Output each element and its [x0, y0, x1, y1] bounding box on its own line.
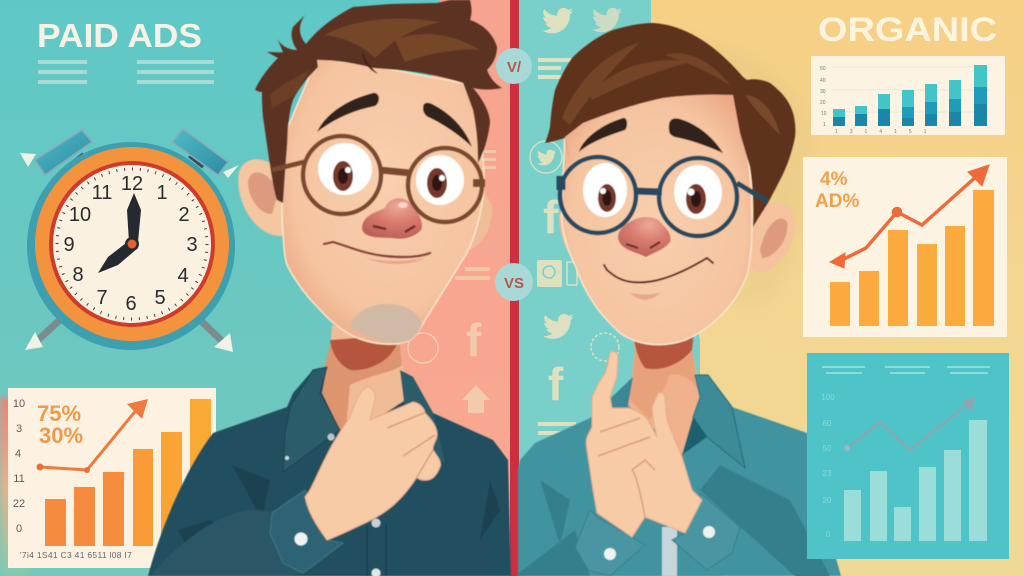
left cuff [575, 510, 645, 576]
clock numerals: 5 [154, 287, 166, 309]
shirt folds [178, 465, 500, 555]
hair [545, 23, 795, 227]
stacked bar chart: organic: 1314151 [835, 129, 938, 135]
shirt shading [515, 465, 830, 576]
chart bars [45, 399, 211, 546]
placket and buttons [367, 518, 386, 576]
nose [618, 217, 671, 257]
bell stems [70, 155, 204, 166]
glasses [560, 157, 768, 236]
bell pins [20, 153, 239, 178]
gridlines and axis labels: 40 [820, 78, 826, 84]
eyebrows [317, 93, 472, 147]
collar [610, 375, 745, 468]
clock numerals: 1 [156, 182, 168, 204]
alarm bells [35, 129, 228, 175]
left ear [238, 159, 283, 236]
clock legs [38, 317, 223, 342]
stubble [350, 304, 422, 343]
chart axis labels: 10 [13, 398, 25, 410]
hand [305, 387, 441, 540]
header lines [822, 366, 990, 374]
shirt [518, 375, 841, 576]
icon: facebook f: f [548, 358, 564, 410]
bars [833, 65, 987, 126]
icon: home [462, 385, 490, 413]
icon: twitter bird [543, 314, 574, 339]
icon: wheel [408, 333, 438, 363]
cuff button [703, 526, 715, 538]
bar chart: organic growth: AD% [815, 191, 859, 212]
trend arrow [36, 399, 148, 473]
clock numerals: 11 [92, 182, 112, 204]
cuff [270, 490, 343, 573]
axis labels [821, 393, 835, 539]
eyebrows [579, 118, 723, 153]
axis labels: 100 [821, 393, 835, 402]
gridlines and axis labels: 10 [821, 111, 827, 117]
trend arrow [830, 165, 989, 268]
vs badge top [496, 48, 532, 84]
gridlines and axis labels: 30 [820, 89, 826, 95]
icon: camera app [537, 260, 577, 287]
cuff button [604, 548, 616, 560]
bar chart: paid: 30% [39, 423, 83, 448]
right character [515, 23, 841, 576]
bar chart: organic growth [803, 157, 1007, 337]
clock numerals: 6 [125, 293, 137, 315]
glasses [272, 136, 485, 222]
cuff button [294, 532, 308, 546]
hands [586, 351, 702, 537]
clock hands [98, 193, 141, 273]
vs badge bottom [495, 263, 533, 301]
alarm clock [20, 129, 239, 352]
mouth [604, 258, 713, 282]
bars [844, 420, 987, 541]
icon: text lines [538, 58, 571, 79]
chart axis labels: 4 [15, 448, 21, 460]
eyes [583, 163, 722, 219]
trend arrow [844, 397, 976, 451]
clock numerals: 2 [178, 204, 190, 226]
icon: twitter circle [530, 141, 562, 173]
icon: clock outline [591, 333, 619, 361]
clock numerals: 7 [96, 287, 108, 309]
chart axis labels: 0 [16, 523, 22, 535]
shirt [148, 367, 511, 576]
chart axis labels: 22 [13, 498, 25, 510]
icon: twitter bird [542, 8, 573, 33]
clock body [27, 142, 235, 350]
chin crease [630, 293, 660, 300]
icon: text lines [470, 150, 496, 169]
clock numerals: 4 [177, 265, 189, 287]
bar chart: paid: '7i4 1S41 C3 41 6511 l08 I7 [20, 550, 132, 560]
eyes [318, 143, 464, 205]
title: organic: ORGANIC [818, 11, 997, 49]
left ear [559, 205, 573, 260]
clock numerals: 3 [186, 234, 198, 256]
hair [255, 0, 502, 203]
right ear [466, 190, 492, 250]
vs badge top: V/ [507, 59, 522, 76]
gridlines and axis labels: 20 [820, 100, 826, 106]
mouth [324, 242, 430, 264]
axis labels: 20 [823, 496, 832, 505]
neck [318, 325, 408, 440]
right cuff [672, 493, 740, 570]
bar chart: teal [807, 353, 1009, 559]
icon: twitter bird [592, 8, 622, 32]
clock tick marks [57, 169, 207, 319]
collar [283, 367, 445, 472]
percentages: 4% [820, 169, 848, 190]
zipper [662, 527, 677, 576]
clock numerals: 9 [63, 234, 75, 256]
face [282, 58, 484, 344]
gridlines and axis labels: 50 [820, 66, 826, 72]
title: paid ads [37, 17, 214, 84]
nose [362, 198, 422, 239]
chart axis labels: 3 [16, 423, 22, 435]
icon: facebook f: f [543, 191, 559, 243]
axis labels: 60 [823, 419, 832, 428]
clock numerals: 8 [72, 264, 84, 286]
left sleeve [150, 510, 303, 576]
axis labels: 0 [826, 530, 831, 539]
clock numerals: 12 [121, 173, 143, 195]
center divider [510, 0, 519, 576]
faint social icons on the center panels [408, 8, 622, 435]
right ear [748, 202, 795, 273]
chart percentages: 75% [37, 401, 81, 426]
axis labels: 23 [823, 469, 832, 478]
neck [628, 330, 702, 455]
gridlines and axis labels [820, 66, 827, 128]
clock numerals: 10 [69, 204, 91, 226]
left character [148, 0, 511, 576]
vs badge bottom: VS [504, 275, 524, 292]
icon: facebook f left: f [466, 314, 482, 366]
icon: text lines [538, 422, 576, 435]
bar chart: paid [8, 388, 216, 568]
chart axis labels [13, 398, 25, 535]
bars [830, 190, 994, 326]
face [562, 85, 752, 345]
text lines under title [38, 60, 214, 84]
title: paid ads: PAID ADS [37, 17, 202, 54]
stacked bar chart: organic [811, 56, 1005, 135]
chart axis labels: 11 [13, 473, 25, 485]
axis labels: 50 [823, 444, 832, 453]
icon: text lines [455, 267, 490, 280]
clock numerals [63, 173, 198, 315]
gridlines and axis labels: 1 [823, 122, 826, 128]
